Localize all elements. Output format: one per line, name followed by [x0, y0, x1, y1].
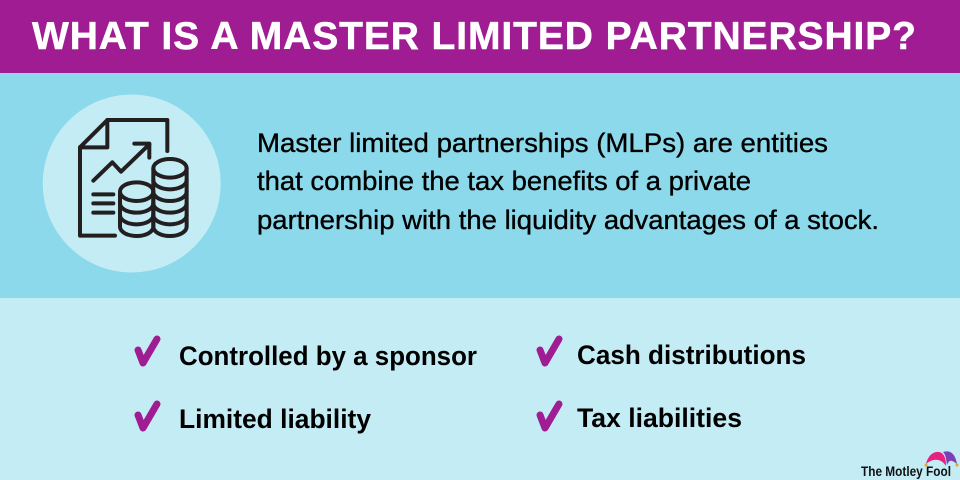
- panel: intro background: [0, 73, 960, 298]
- title banner: WHAT IS A MASTER LIMITED PARTNERSHIP?: [32, 15, 916, 58]
- description text: that combine the tax benefits of a private: [257, 166, 751, 196]
- description text: [257, 128, 879, 235]
- logo: The Motley Fool: [861, 451, 958, 479]
- description text: Master limited partnerships (MLPs) are entities: [257, 128, 828, 158]
- list item: Controlled by a sponsor: Controlled by a sponsor: [179, 341, 477, 371]
- title banner: [0, 0, 960, 73]
- list item: Cash distributions: Cash distributions: [577, 340, 806, 370]
- icon: document with chart and coins: [43, 94, 221, 272]
- list item: Limited liability: Limited liability: [179, 404, 371, 434]
- description text: partnership with the liquidity advantages of a stock.: [257, 205, 879, 235]
- list item: Tax liabilities: Tax liabilities: [577, 403, 742, 433]
